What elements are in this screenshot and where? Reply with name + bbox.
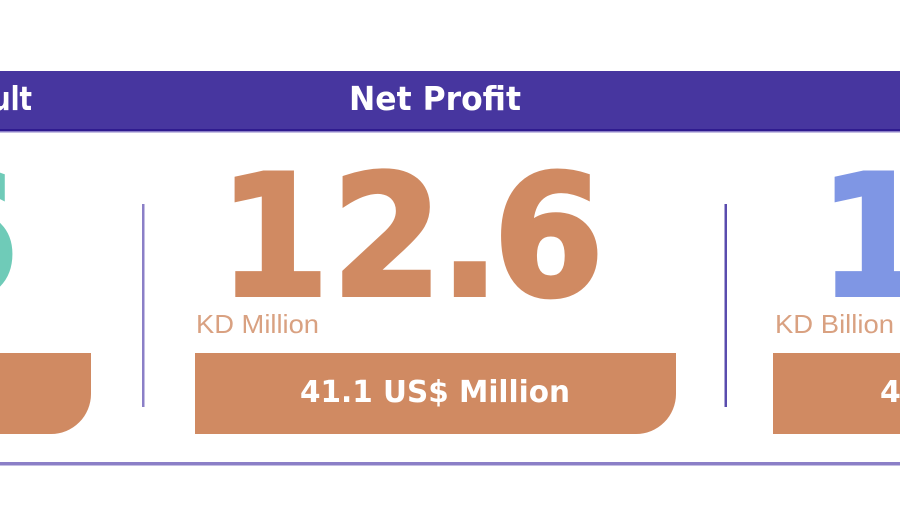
panel: net profit: KD Million	[196, 309, 319, 339]
divider	[142, 204, 144, 407]
divider	[724, 204, 727, 407]
header band: Net Profit	[349, 79, 521, 118]
panel: right figure, partly cropped: KD Billion	[775, 309, 894, 339]
panel: net profit: 12.6	[219, 139, 604, 335]
panel: left result, partly cropped	[0, 139, 91, 434]
panel: right figure, partly cropped	[773, 139, 900, 434]
panel: net profit	[195, 139, 676, 434]
bottom rule	[0, 462, 900, 466]
header band	[0, 71, 900, 132]
panel: net profit: 41.1 US$ Million	[300, 375, 570, 410]
